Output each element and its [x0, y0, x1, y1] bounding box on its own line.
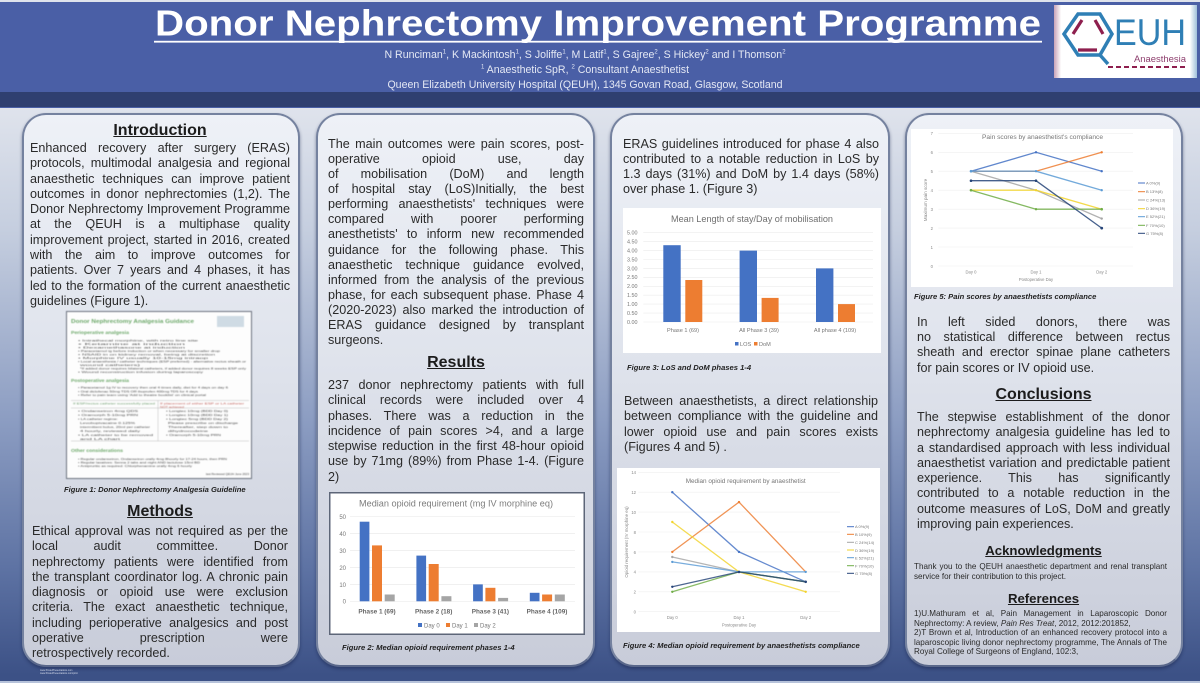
bar chart: median opioid requirement: Median opioid requirement (mg IV morphine eq) — [359, 498, 553, 508]
text: conclusions body: nephrectomy analgesia guideline has led to — [917, 425, 1170, 439]
figure 1: analgesia guideline thumbnail: • Local anaesthesia / catheter techniques (ESP preferred) - alternative rectus sheath or — [78, 360, 246, 364]
caption: figure 5: Figure 5: Pain scores by anaesthetists compliance — [914, 292, 1096, 301]
bar chart: mean length of stay and day of mobilisation: 1.00 — [627, 302, 638, 308]
line chart: median opioid requirement by anaesthetist: 8 — [634, 530, 637, 535]
text: main outcomes body — [328, 137, 584, 347]
figure 1: analgesia guideline thumbnail: • LA catheter regime: — [78, 417, 118, 421]
figure 1: analgesia guideline thumbnail: Thereafter, step down to — [168, 425, 228, 429]
line chart: pain scores by anaesthetist's compliance: B 13%(8) — [1146, 189, 1163, 194]
line chart: median opioid requirement by anaesthetist: 0 — [634, 610, 637, 614]
text: conclusions body: a standardised approach with less individual — [917, 440, 1170, 454]
caption: figure 4: Figure 4: Median opioid requirement by anaesthetists compliance — [623, 641, 860, 650]
authors and affiliations — [384, 48, 786, 90]
line chart: pain scores by anaesthetist's compliance: C 24%(13) — [1146, 198, 1166, 202]
caption: figure 1: Figure 1: Donor Nephrectomy Analgesia Guideline — [64, 485, 246, 494]
text: conclusions body: The stepwise establishment of the donor — [917, 410, 1170, 424]
text: references list: laparoscopic living donor nephrectomy programme, The Annals of The — [914, 638, 1167, 647]
line chart: pain scores by anaesthetist's compliance: E 52%(21) — [1146, 214, 1166, 219]
figure 1: analgesia guideline thumbnail: • Morphine IV usually 10-15mg intraop — [78, 356, 209, 360]
figure 1: analgesia guideline thumbnail: Donor Nephrectomy Analgesia Guidance — [71, 319, 194, 325]
line chart: pain scores by anaesthetist's compliance — [911, 129, 1173, 287]
bar chart: mean length of stay and day of mobilisation: Phase 1 (69) — [667, 328, 699, 334]
figure 1: analgesia guideline thumbnail: last Reviewed QEUH June 2023 — [206, 472, 249, 476]
figure 1: analgesia guideline thumbnail: intermittent bolus, 20ml per catheter — [80, 425, 150, 429]
text: main outcomes body: compared with poorer performing — [328, 212, 584, 226]
text: main outcomes body: guidance for the following phase. This — [328, 243, 584, 257]
text: conclusions body: anaesthetist variation and predictable patient — [917, 456, 1170, 470]
authors and affiliations: N Runciman1, K Mackintosh1, S Joliffe1, M Latif1, S Gajree2, S Hickey2 and I Thomson2 — [384, 48, 786, 60]
text: results body: clinical records were included over 4 — [328, 393, 584, 407]
text: left sided donors body: no statistical difference between rectus — [917, 330, 1170, 344]
line chart: pain scores by anaesthetist's compliance: Day 1 — [1031, 270, 1042, 274]
line chart: median opioid requirement by anaesthetist: Median opioid requirement by anaesthetist — [686, 478, 806, 485]
line chart: median opioid requirement by anaesthetist: 6 — [634, 550, 637, 555]
text: methods body: operative prescription were — [32, 631, 288, 645]
panel: figure 5, conclusions, acknowledgments and references — [905, 113, 1183, 667]
text: conclusions body: outcome measures of LoS, DoM and greatly — [917, 502, 1170, 516]
bar chart: median opioid requirement: Phase 2 (18) — [415, 608, 452, 616]
figure 1: analgesia guideline thumbnail: • Refer to pain team using 'Add to theatre booklist' on clinical portal — [78, 393, 206, 397]
text: methods body: including perioperative analgesics and post — [32, 616, 288, 630]
figure 1: analgesia guideline thumbnail: If placement of either ESP or LA catheter — [160, 402, 244, 406]
text: acknowledgments body: service for their contribution to this project. — [914, 572, 1066, 581]
text: references list: 1)U.Mathuram et al, Pain Management in Laparoscopic Donor — [914, 609, 1167, 618]
text: introduction body: Enhanced recovery after surgery (ERAS) — [30, 141, 290, 155]
caption: figure 2: Figure 2: Median opioid requirement phases 1-4 — [342, 643, 515, 652]
bar chart: mean length of stay and day of mobilisation: 2.00 — [627, 284, 638, 290]
logo: QEUH Anaesthesia: EUH — [1114, 12, 1186, 53]
figure 1: analgesia guideline thumbnail: If ESP/rectus catheter successfully placed — [73, 402, 155, 406]
line chart: median opioid requirement by anaesthetist: Postoperative Day — [722, 622, 757, 628]
text: references list: 2)T Brown et al, Introduction of an enhanced recovery protocol into a — [914, 628, 1167, 637]
bar chart: median opioid requirement: Phase 3 (41) — [472, 608, 509, 616]
text: main outcomes body: phase, for each subsequent phase. Phase 4 — [328, 288, 584, 302]
bar chart: mean length of stay and day of mobilisation: 4.50 — [627, 240, 638, 246]
line chart: pain scores by anaesthetist's compliance: Pain scores by anaesthetist's compliance — [982, 134, 1103, 141]
logo: QEUH Anaesthesia — [1054, 5, 1197, 78]
figure 1: analgesia guideline thumbnail: • Longtec 10mg (BDD Day 1) — [166, 413, 228, 417]
text: introduction body: outcomes in donor nephrectomies (1,2). The — [30, 187, 290, 201]
authors and affiliations: Queen Elizabeth University Hospital (QEUH), 1345 Govan Road, Glasgow, Scotland — [387, 78, 783, 90]
figure 1: analgesia guideline thumbnail: • Oral diclofenac 50mg TDS OR ibuprofen 400mg TDS for 4 days — [78, 390, 199, 394]
line chart: pain scores by anaesthetist's compliance: F 70%(10) — [1146, 223, 1165, 228]
text: results body: 237 donor nephrectomy patients with full — [328, 378, 584, 392]
text: results body: stepwise reduction in the first 48-hour opioid — [328, 439, 584, 453]
bar chart: median opioid requirement: Phase 1 (69) — [358, 608, 396, 616]
line chart: median opioid requirement by anaesthetist: D 36%(19) — [855, 548, 875, 553]
text: ERAS guidelines body — [623, 137, 879, 196]
figure 1: analgesia guideline thumbnail: NOT achieved — [160, 405, 184, 409]
text: introduction body: protocols, multimodal analgesia and regional — [30, 156, 290, 170]
bar chart: median opioid requirement: 30 — [339, 549, 347, 555]
bar chart: median opioid requirement: 0 — [343, 600, 347, 606]
line chart: median opioid requirement by anaesthetist: F 70%(10) — [855, 564, 874, 568]
text: main outcomes body: operative opioid use, day — [328, 152, 584, 166]
line chart: pain scores by anaesthetist's compliance: Day 0 — [966, 270, 977, 274]
text: compliance relationship body: Between anaesthetists, a direct relationship — [624, 394, 878, 408]
text: references list — [914, 609, 1167, 656]
authors and affiliations: 1 Anaesthetic SpR, 2 Consultant Anaesthetist — [481, 64, 689, 76]
text: main outcomes body: anesthetists' to inform new recommended — [328, 227, 584, 241]
bar chart: median opioid requirement: Day 2 — [480, 624, 496, 630]
text: left sided donors body: for pain scores or IV opioid use. — [917, 361, 1094, 375]
line chart: pain scores by anaesthetist's compliance: Maximum pain score — [923, 178, 928, 221]
text: conclusions body: improving pain experiences. — [917, 517, 1074, 531]
line chart: median opioid requirement by anaesthetist: 2 — [634, 590, 637, 594]
text: introduction body: patients. Over 7 years and 4 phases, it has — [30, 263, 290, 277]
bar chart: mean length of stay and day of mobilisation: 5.00 — [627, 230, 638, 236]
line chart: median opioid requirement by anaesthetist: 14 — [631, 470, 637, 475]
heading: Methods: Methods — [127, 503, 193, 520]
line chart: median opioid requirement by anaesthetist: A 0%(9) — [855, 524, 870, 529]
figure 1: analgesia guideline thumbnail: • Regular laxatives: Senna 2 tabs and night AND lactulose 15ml BD — [78, 460, 201, 464]
footer small print: www.PosterPresentations.com — [40, 669, 72, 672]
figure 1: analgesia guideline thumbnail: • Wound reconstruction infusion during laparoscopy — [78, 370, 204, 374]
heading: Introduction: Introduction — [113, 122, 207, 139]
text: results body: use by 71mg (89%) from Phase 1-4. (Figure — [328, 454, 584, 468]
bar chart: median opioid requirement: 20 — [339, 566, 347, 572]
bar chart: median opioid requirement: 40 — [339, 532, 347, 538]
text: compliance relationship body: (Figures 4 and 5) . — [624, 440, 727, 454]
bar chart: median opioid requirement: Phase 4 (109) — [527, 608, 567, 616]
figure 1: analgesia guideline thumbnail: 4 hourly, reviewed daily — [80, 429, 141, 433]
text: main outcomes body: surgeons. — [328, 333, 383, 347]
line chart: median opioid requirement by anaesthetist: 12 — [631, 490, 637, 495]
line chart: median opioid requirement by anaesthetist: B 10%(9) — [855, 532, 872, 537]
line chart: median opioid requirement by anaesthetist: C 24%(14) — [855, 540, 875, 545]
line chart: median opioid requirement by anaesthetist — [617, 468, 880, 632]
bar chart: mean length of stay and day of mobilisation: All Phase 3 (39) — [739, 328, 779, 334]
text: main outcomes body: of mobilisation (DoM) and length — [328, 167, 584, 181]
text: results body: phases. There was a reduction in the — [328, 408, 584, 422]
bar chart: mean length of stay and day of mobilisation: 3.50 — [627, 258, 638, 264]
figure 1: analgesia guideline thumbnail: Other considerations — [71, 448, 124, 453]
text: left sided donors body: sheath and erector spinae plane catheters — [917, 345, 1170, 359]
bar chart: mean length of stay and day of mobilisation: LOS — [740, 342, 751, 348]
figure 1: analgesia guideline thumbnail: *If added donor requires bilateral catheters, if added donor requires 8 weeks ESP only — [80, 366, 247, 370]
text: conclusions body: experience. This has significantly — [917, 471, 1170, 485]
text: methods body: diagnosis or opioid use were exclusion — [32, 585, 288, 599]
line chart: pain scores by anaesthetist's compliance: Day 2 — [1096, 270, 1108, 274]
text: introduction body: improvement project, started in 2016, created — [30, 233, 290, 247]
bar chart: median opioid requirement — [329, 492, 585, 635]
line chart: pain scores by anaesthetist's compliance: A 0%(9) — [1146, 180, 1161, 186]
text: methods body: nephrectomy patients were identified from — [32, 554, 288, 568]
line chart: pain scores by anaesthetist's compliance: 2 — [931, 226, 934, 231]
text: results body — [328, 378, 584, 484]
bar chart: mean length of stay and day of mobilisation — [623, 208, 881, 353]
text: ERAS guidelines body: contributed to a notable reduction in LoS by — [623, 152, 879, 166]
bar chart: mean length of stay and day of mobilisation: 1.50 — [627, 293, 638, 299]
line chart: pain scores by anaesthetist's compliance: Postoperative Day — [1019, 277, 1054, 282]
heading: Conclusions: Conclusions — [995, 386, 1092, 403]
bar chart: mean length of stay and day of mobilisation: 0.50 — [627, 311, 638, 317]
text: main outcomes body: performing anaesthetists' techniques were — [328, 197, 584, 211]
line chart: median opioid requirement by anaesthetist: Opioid requirement (IV morphine eq) — [624, 506, 629, 578]
line chart: median opioid requirement by anaesthetist: 4 — [634, 570, 637, 574]
text: ERAS guidelines body: 1.3 days (31%) and DoM by 1.4 days (58%) — [623, 167, 879, 181]
text: main outcomes body: informed from the analysis of the previous — [328, 273, 584, 287]
line chart: median opioid requirement by anaesthetist: Day 1 — [734, 615, 745, 620]
figure 1: analgesia guideline thumbnail: • Paracetamol ig before induction or when necessary for smaller drop — [78, 349, 220, 353]
heading: Results: Results — [427, 354, 485, 371]
text: introduction body: Donor Nephrectomy Improvement Programme — [30, 202, 290, 216]
text: ERAS guidelines body: over phase 1. (Figure 3) — [623, 182, 757, 196]
bar chart: mean length of stay and day of mobilisation: 3.00 — [627, 266, 638, 272]
text: introduction body: at the QEUH is a multiphase quality — [30, 217, 290, 231]
figure 1: analgesia guideline thumbnail: and LA chart — [80, 437, 120, 441]
figure 1: analgesia guideline thumbnail: • Ketamine at induction — [78, 342, 186, 346]
figure 1: analgesia guideline thumbnail: • Oramorph 5-10mg PRN — [166, 433, 221, 437]
text: methods body — [32, 524, 288, 660]
dark header band — [0, 92, 1200, 107]
text: introduction body: anaesthetic techniques can improve patient — [30, 172, 290, 186]
bar chart: median opioid requirement: Day 1 — [452, 624, 468, 630]
panel: ERAS guidance, figures 3 and 4 — [610, 113, 890, 667]
text: conclusions body: contributed to a notable reduction in the — [917, 486, 1170, 500]
line chart: pain scores by anaesthetist's compliance: 3 — [931, 207, 934, 212]
text: conclusions body — [917, 410, 1170, 531]
line chart: pain scores by anaesthetist's compliance: 6 — [931, 150, 934, 155]
figure 1: analgesia guideline thumbnail: • Longtec 10mg (BDD Day 0) — [166, 409, 228, 413]
text: methods body: criteria. The exact anaesthetic technique, — [32, 600, 288, 614]
footer small print: www.PosterPresentations.com/print — [40, 672, 78, 675]
logo: QEUH Anaesthesia: Anaesthesia — [1134, 54, 1186, 64]
figure 1: analgesia guideline thumbnail: • Antipruritic as required: Chlorphenamine orally 4mg 6 hourly — [78, 464, 193, 468]
figure 1: analgesia guideline thumbnail: • Ondansetron 4mg QDS — [78, 409, 138, 413]
line chart: pain scores by anaesthetist's compliance: D 36%(19) — [1146, 206, 1166, 211]
line chart: pain scores by anaesthetist's compliance: 7 — [931, 131, 934, 136]
line chart: median opioid requirement by anaesthetist: Day 2 — [800, 615, 812, 620]
text: introduction body: guidelines (Figure 1). — [30, 294, 148, 308]
bar chart: mean length of stay and day of mobilisation: 2.50 — [627, 275, 638, 281]
line chart: pain scores by anaesthetist's compliance: 5 — [931, 169, 934, 174]
figure 1: analgesia guideline thumbnail: Please prescribe on discharge — [168, 421, 238, 425]
text: main outcomes body: of hospital stay (LoS)Initially, the best — [328, 182, 584, 196]
bar chart: mean length of stay and day of mobilisation: 0.00 — [627, 320, 638, 326]
title: Donor Nephrectomy Improvement Programme — [155, 2, 1041, 44]
line chart: median opioid requirement by anaesthetist: 10 — [631, 510, 637, 515]
text: ERAS guidelines body: ERAS guidelines introduced for phase 4 also — [623, 137, 879, 151]
text: left sided donors body: In left sided donors, there was — [917, 315, 1170, 329]
line chart: pain scores by anaesthetist's compliance: 0 — [931, 264, 934, 269]
bar chart: mean length of stay and day of mobilisation: 4.00 — [627, 248, 638, 254]
figure 1: analgesia guideline thumbnail: wound catheters) — [80, 363, 140, 367]
text: methods body: the transplant coordinator log. A chronic pain — [32, 570, 288, 584]
figure 1: analgesia guideline thumbnail: dihydrocodeine — [168, 429, 209, 433]
text: introduction body — [30, 141, 290, 308]
text: results body: incidence of pain scores >4, and a large — [328, 424, 584, 438]
bar chart: median opioid requirement: Day 0 — [424, 624, 440, 630]
panel: outcomes, results and figure 2 — [316, 113, 595, 667]
text: introduction body: led to the formation of the current anaesthetic — [30, 279, 290, 293]
figure 1: analgesia guideline thumbnail: • Longtec 5mg (BDD Day 2) — [166, 417, 228, 421]
text: main outcomes body: ERAS guidance designed by transplant — [328, 318, 584, 332]
line chart: median opioid requirement by anaesthetist: G 75%(8) — [855, 571, 873, 576]
text: methods body: Ethical approval was not required as per the — [32, 524, 288, 538]
text: acknowledgments body — [914, 562, 1167, 581]
text: main outcomes body: anaesthetic technique guidance evolved, — [328, 258, 584, 272]
figure 1: analgesia guideline thumbnail: • Oramorph 5-10mg PRN — [78, 413, 138, 417]
heading: References: References — [1008, 591, 1079, 606]
text: compliance relationship body — [624, 394, 878, 454]
text: references list: Royal College of Surgeons of England, 102:3, — [914, 647, 1078, 656]
header banner — [0, 2, 1200, 108]
text: methods body: retrospectively recorded. — [32, 646, 170, 660]
bottom edge line — [0, 681, 1200, 683]
line chart: pain scores by anaesthetist's compliance: G 75%(8) — [1146, 231, 1164, 236]
bar chart: median opioid requirement: 10 — [339, 583, 347, 589]
panel: introduction, figure 1 and methods — [22, 113, 300, 667]
bar chart: mean length of stay and day of mobilisation: All phase 4 (109) — [814, 328, 856, 334]
figure 1: analgesia guideline thumbnail — [65, 310, 253, 480]
figure 1: analgesia guideline thumbnail: • LA catheter to be removed — [78, 433, 154, 437]
figure 1: analgesia guideline thumbnail: Postoperative analgesia — [71, 378, 130, 383]
figure 1: analgesia guideline thumbnail: Levobupivacaine 0.125% — [80, 421, 135, 425]
line chart: median opioid requirement by anaesthetist: Day 0 — [667, 615, 678, 620]
heading: Acknowledgments: Acknowledgments — [985, 543, 1102, 558]
caption: figure 3: Figure 3: LoS and DoM phases 1-4 — [627, 363, 751, 372]
figure 1: analgesia guideline thumbnail: • Dexamethasone at induction — [78, 346, 186, 350]
figure 1: analgesia guideline thumbnail: • Intrathecal morphine, with retro line site — [78, 338, 199, 342]
text: main outcomes body: (2020-2023) also marked the introduction of — [328, 303, 584, 317]
footer small print — [40, 669, 78, 675]
text: references list: Nephrectomy: A review, Pain Res Treat, 2012, 2012:201852, — [914, 619, 1131, 628]
line chart: pain scores by anaesthetist's compliance: 4 — [931, 188, 934, 193]
text: compliance relationship body: between compliance with the guideline and — [624, 409, 878, 423]
text: compliance relationship body: lower opioid use and pain scores exists — [624, 424, 878, 438]
text: introduction body: with the aim to improve outcomes for — [30, 248, 290, 262]
figure 1: analgesia guideline thumbnail: Perioperative analgesia — [71, 330, 130, 335]
text: acknowledgments body: Thank you to the QEUH anaesthetic department and renal transplant — [914, 562, 1167, 571]
bar chart: median opioid requirement: 50 — [339, 515, 347, 521]
bar chart: mean length of stay and day of mobilisation: DoM — [759, 342, 771, 348]
text: main outcomes body: The main outcomes were pain scores, post- — [328, 137, 584, 151]
figure 1: analgesia guideline thumbnail: • NSAID in on kidney removal, being at discretion — [78, 352, 216, 356]
text: left sided donors body — [917, 315, 1170, 375]
figure 1: analgesia guideline thumbnail: • Paracetamol 1g IV to recovery then oral 4 times daily, diet for 4 days on day 6 — [78, 386, 228, 390]
line chart: pain scores by anaesthetist's compliance: 1 — [931, 245, 934, 250]
text: methods body: local audit committee. Donor — [32, 539, 288, 553]
figure 1: analgesia guideline thumbnail: • Regular ondansetron, Ondansetron orally 4mg 8hourly for 17-24 hours, then PRN — [78, 457, 227, 461]
text: results body: 2) — [328, 470, 339, 484]
line chart: median opioid requirement by anaesthetist: E 52%(21) — [855, 556, 875, 560]
bar chart: mean length of stay and day of mobilisation: Mean Length of stay/Day of mobilisation — [671, 214, 833, 224]
